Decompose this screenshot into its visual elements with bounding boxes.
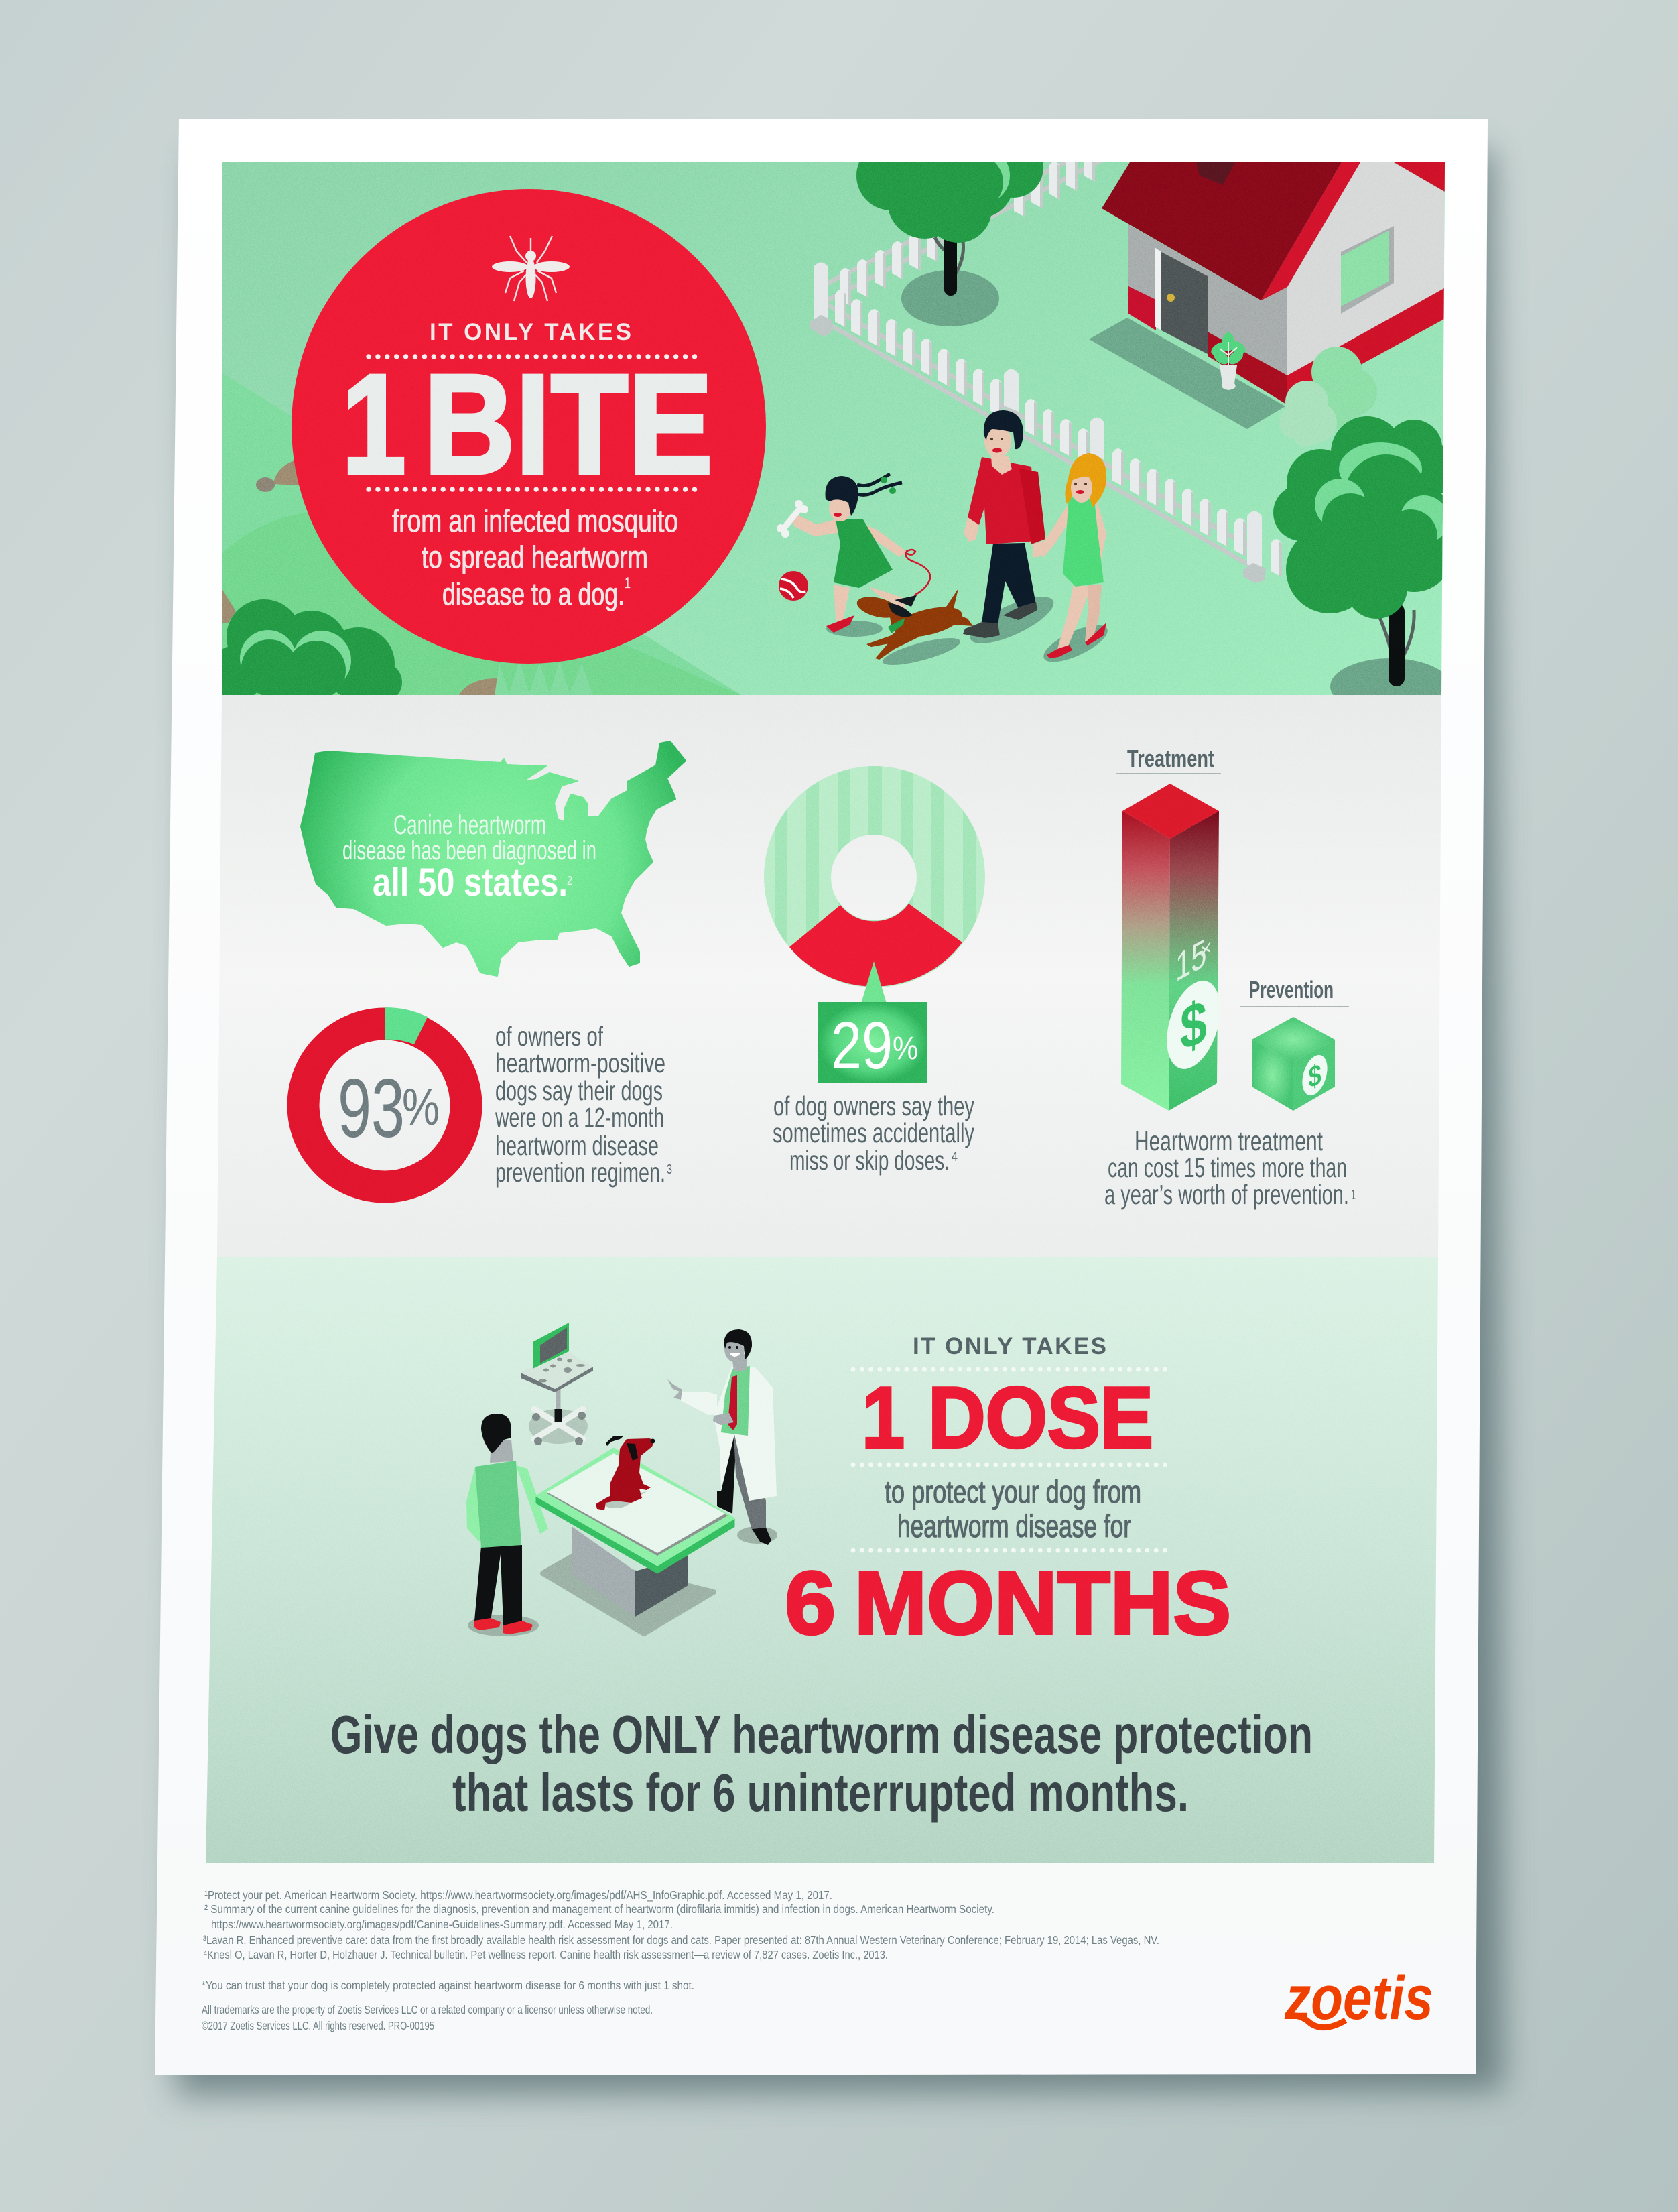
footnotes: ⁴Knesl O, Lavan R, Horter D, Holzhauer J. Technical bulletin. Pet wellness report. Canine health risk assessment—a review of 7,827 cases. Zoetis Inc., 2013.: [203, 1948, 888, 1961]
text: it only takes: IT ONLY TAKES: [430, 319, 631, 345]
person: girl: [777, 474, 907, 637]
divider dots: [369, 487, 695, 492]
text: 93% description: heartworm disease: [495, 1130, 659, 1161]
headline: 1 bite: 1: [342, 345, 406, 503]
fence: front section: [810, 263, 1282, 583]
footnotes: https://www.heartwormsociety.org/images/pdf/Canine-Guidelines-Summary.pdf. Accessed May 1, 2017.: [211, 1918, 673, 1931]
bushes: light: [1279, 347, 1377, 447]
grass: [495, 660, 593, 696]
text: 93% description: [495, 1021, 672, 1188]
panel: neighborhood scene: [222, 162, 1445, 695]
text: all 50 states: [342, 810, 596, 904]
text: cost description: [1104, 1125, 1356, 1210]
text: 93% description: dogs say their dogs: [495, 1075, 663, 1106]
text: 93% description: heartworm-positive: [495, 1048, 665, 1079]
dog: on table: [596, 1436, 655, 1510]
text: bite description: [392, 503, 678, 611]
text: 93% description: were on a 12-month: [495, 1102, 664, 1133]
headline: 6 months: MONTHS: [854, 1554, 1231, 1653]
callout: 29%: 29: [831, 1008, 893, 1083]
text: 29% description: miss or skip doses.: [789, 1145, 950, 1176]
callout: 29%: %: [893, 1031, 918, 1066]
tree: back yard: [856, 162, 1043, 326]
chart: 93% donut: %: [402, 1077, 440, 1136]
text: cost description: 1: [1351, 1188, 1356, 1203]
dog: running: [855, 589, 973, 670]
headline: give dogs protection: that lasts for 6 uninterrupted months.: [452, 1763, 1189, 1823]
footnotes: ³Lavan R. Enhanced preventive care: data from the first broadly available health risk assessment for dogs and cats. Paper presented at: 87th Annual Western Veterinary Conference; February 19, 2014; Las Vegas, NV.: [203, 1933, 1159, 1947]
text: bite description: from an infected mosquito: [392, 503, 678, 538]
label: treatment: Treatment: [1127, 745, 1214, 772]
headline: give dogs protection: [330, 1705, 1313, 1823]
person: veterinarian: [667, 1329, 777, 1545]
text: bite description: to spread heartworm: [422, 540, 648, 574]
icon: dollar coin: $: [1180, 986, 1207, 1064]
poster sheet: [155, 119, 1488, 2075]
chart: prevention cube: [1240, 976, 1349, 1111]
plant in vase: [1209, 332, 1248, 390]
footnotes: ©2017 Zoetis Services LLC. All rights reserved. PRO-00195: [202, 2019, 434, 2032]
panel: statistics background: [217, 695, 1441, 1257]
text: cost description: can cost 15 times more than: [1108, 1152, 1347, 1183]
text: bite description: disease to a dog.: [442, 576, 625, 611]
label: prevention: Prevention: [1249, 976, 1334, 1003]
icon: dollar coin: [1298, 1052, 1332, 1099]
icon: mosquito: [492, 236, 570, 301]
text: 15x: ×: [1200, 934, 1212, 965]
headline: give dogs protection: Give dogs the ONLY heartworm disease protection: [330, 1705, 1313, 1764]
text: all 50 states: 2: [567, 874, 572, 887]
headline: 6 months: 6: [785, 1554, 836, 1653]
leash: [906, 550, 930, 604]
text: protect your dog: heartworm disease for: [897, 1508, 1131, 1544]
logo: zoetis: zoetis: [1284, 1964, 1433, 2032]
person: pet owner: [466, 1414, 548, 1636]
chart: 93% donut: 93: [338, 1062, 405, 1155]
map: united states: [301, 741, 686, 976]
text: protect your dog: [885, 1474, 1141, 1544]
ultrasound cart: [521, 1323, 593, 1445]
text: it only takes: IT ONLY TAKES: [913, 1333, 1106, 1359]
text: 29% description: of dog owners say they: [773, 1091, 974, 1121]
callout: 29%: [818, 961, 927, 1083]
text: all 50 states: Canine heartworm: [393, 810, 546, 840]
footnotes: ¹Protect your pet. American Heartworm Society. https://www.heartwormsociety.org/images/pdf/AHS_InfoGraphic.pdf. Accessed May 1, 2017.: [204, 1888, 832, 1902]
divider dots: [853, 1367, 1167, 1371]
paper grain: [201, 161, 1447, 1865]
headline: 1 dose: DOSE: [928, 1369, 1153, 1466]
text: cost description: a year’s worth of prevention.: [1104, 1179, 1349, 1210]
chart: treatment column: [1116, 745, 1230, 1111]
callout: 1 bite circle: [292, 189, 766, 664]
text: 29% description: sometimes accidentally: [773, 1117, 974, 1148]
illustration: vet exam room: [466, 1323, 777, 1636]
chart: 29% donut: [757, 761, 992, 1083]
text: 93% description: prevention regimen.: [495, 1157, 665, 1188]
person: woman: [1037, 453, 1112, 669]
text: 15x: 15: [1175, 930, 1206, 991]
house: [1089, 162, 1445, 429]
fence: rear section: [828, 162, 1103, 306]
icon: dollar coin: $: [1308, 1058, 1321, 1095]
divider dots: [853, 1463, 1167, 1467]
text: 29% description: 4: [952, 1150, 958, 1164]
tree: front right: [1273, 416, 1456, 715]
text: all 50 states: all 50 states.: [373, 861, 568, 904]
divider dots: [853, 1548, 1167, 1552]
text: bite description: 1: [625, 574, 631, 591]
text: protect your dog: to protect your dog from: [885, 1474, 1141, 1510]
footnotes: *You can trust that your dog is completely protected against heartworm disease for 6 months with just 1 shot.: [202, 1979, 694, 1992]
headline: 1 bite: BITE: [424, 345, 713, 503]
text: cost description: Heartworm treatment: [1135, 1125, 1323, 1156]
chart: 93% donut: [303, 1007, 466, 1186]
rocks: [222, 459, 497, 696]
poster shadow: [176, 151, 1504, 2095]
icon: dollar coin: [1157, 974, 1230, 1076]
text: 93% description: of owners of: [495, 1021, 603, 1052]
text: 29% description: [773, 1091, 974, 1176]
footnotes: [202, 1888, 1159, 2032]
red ball: [779, 571, 808, 601]
headline: 1 dose: 1: [862, 1369, 905, 1466]
exam table: [537, 1436, 734, 1634]
text: all 50 states: disease has been diagnosed in: [342, 836, 596, 865]
person: man: [963, 410, 1059, 653]
panel: 1 dose background: [206, 1257, 1438, 1863]
text: 93% description: 3: [667, 1162, 672, 1177]
footnotes: All trademarks are the property of Zoetis Services LLC or a related company or a licensor unless otherwise noted.: [202, 2003, 653, 2016]
footnotes: ² Summary of the current canine guidelines for the diagnosis, prevention and management of heartworm (dirofilaria immitis) and infection in dogs. American Heartworm Society.: [204, 1902, 994, 1916]
bush: bottom left: [222, 599, 402, 695]
divider dots: [369, 354, 695, 359]
